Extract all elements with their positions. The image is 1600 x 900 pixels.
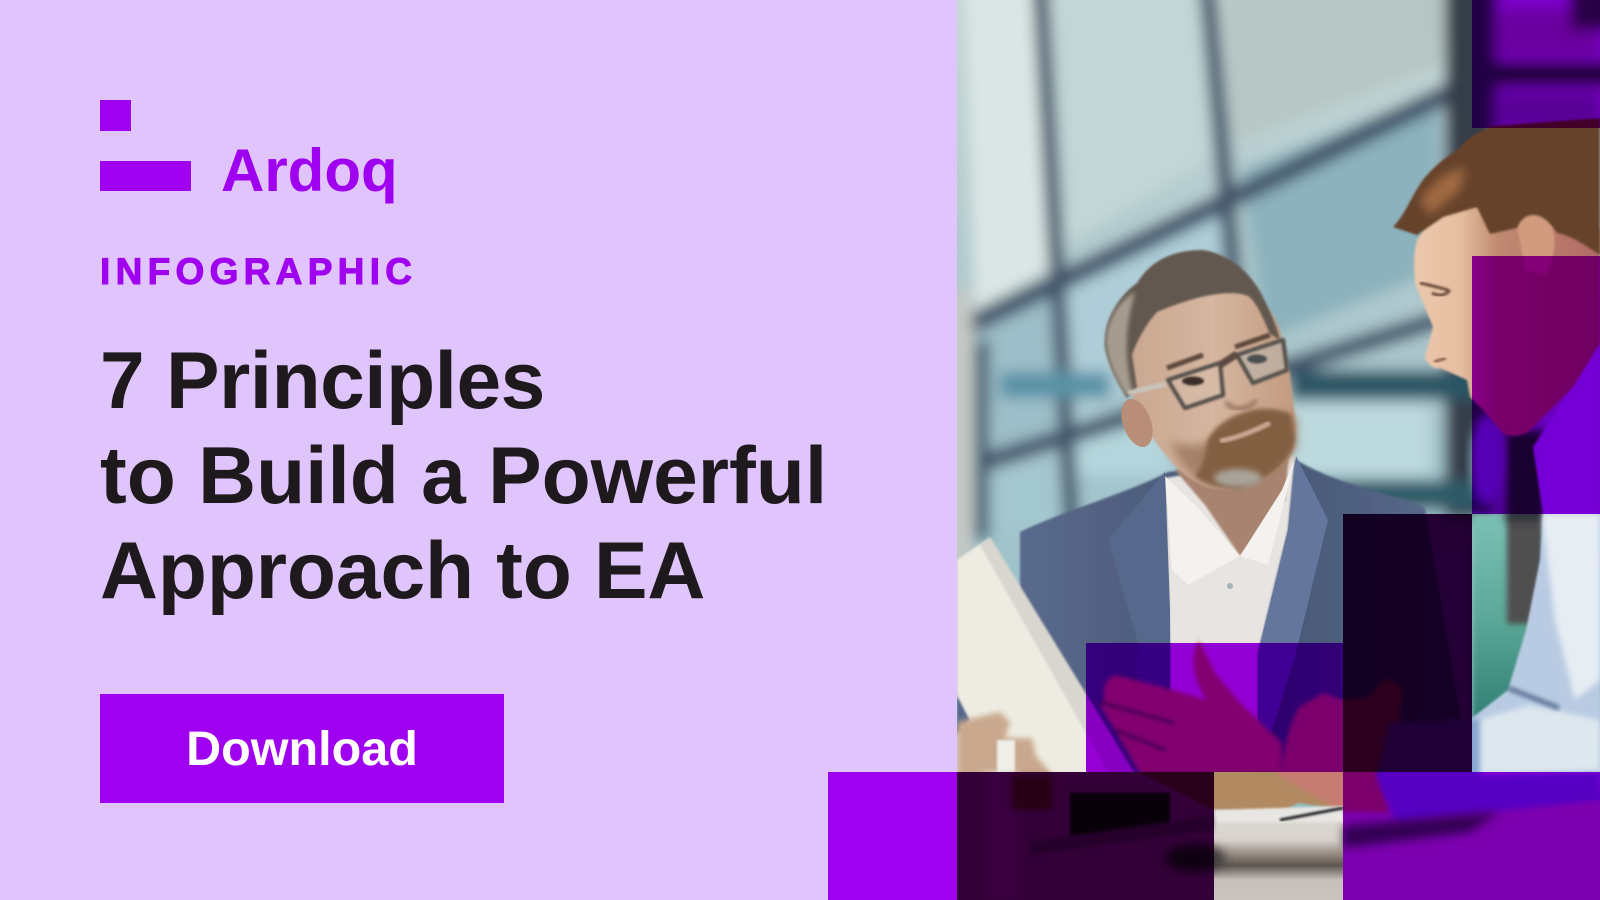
face <box>1128 283 1296 490</box>
second hand <box>1278 678 1402 812</box>
title <box>100 336 827 616</box>
title: Approach to EA <box>100 526 705 616</box>
dark tile: bottom centre <box>957 772 1214 900</box>
logo mark bar <box>100 160 191 191</box>
lapels <box>1108 472 1170 776</box>
logo wordmark: Ardoq <box>221 137 398 204</box>
ear <box>1121 399 1153 447</box>
purple tile: top right <box>1472 0 1600 128</box>
download button <box>100 694 504 803</box>
solid purple tile <box>828 772 957 900</box>
panel: photo with purple tiles <box>828 0 1600 900</box>
chin grey <box>1214 469 1262 487</box>
hand holding tablet <box>957 709 1053 772</box>
tablet <box>957 536 1136 772</box>
table left edge shade <box>983 768 1022 772</box>
pen <box>1280 808 1343 820</box>
papers <box>1215 806 1343 822</box>
neck <box>1174 458 1290 557</box>
area behind right man <box>1471 414 1547 724</box>
man on right <box>1393 118 1600 790</box>
purple tile: right face <box>1472 256 1600 514</box>
dark shadow <box>1343 812 1500 848</box>
collar <box>1165 476 1240 585</box>
window background <box>957 0 1600 815</box>
table right <box>1343 800 1600 900</box>
eye <box>1420 283 1450 295</box>
table dark corner <box>1165 844 1225 872</box>
stubble <box>1170 415 1296 490</box>
button <box>1227 583 1233 589</box>
forearm <box>1141 770 1343 812</box>
title: 7 Principles <box>100 336 545 426</box>
dark hand <box>1141 772 1214 810</box>
eyes and brows <box>1167 335 1270 386</box>
laptop <box>1070 793 1170 837</box>
foreground hand and table <box>950 678 1600 900</box>
eyebrow label: INFOGRAPHIC <box>100 251 417 292</box>
logo mark square <box>100 100 130 130</box>
hair <box>1393 118 1600 255</box>
table left <box>950 772 1220 900</box>
glasses <box>1128 340 1287 408</box>
gesturing hand <box>1099 640 1282 775</box>
shirt <box>1165 456 1296 723</box>
nostril <box>1434 358 1446 362</box>
download button: Download <box>186 722 418 776</box>
shirt highlights <box>1542 514 1600 700</box>
hair <box>1105 250 1280 398</box>
suit jacket <box>1020 458 1470 776</box>
shirt lower <box>1478 704 1600 776</box>
man in suit <box>1020 250 1470 776</box>
hair highlight <box>1420 168 1465 215</box>
shirt <box>1472 343 1600 790</box>
nose <box>1226 400 1256 409</box>
sleeve <box>1377 718 1600 822</box>
purple tile: hand <box>1086 643 1343 772</box>
mouth <box>1220 423 1270 441</box>
logo <box>100 100 398 204</box>
beard <box>1195 409 1295 489</box>
face and neck <box>1414 200 1600 436</box>
ear <box>1517 213 1554 275</box>
window frames <box>970 0 1470 530</box>
fingers below <box>1012 775 1052 810</box>
dark tile: sleeve <box>1343 514 1472 772</box>
table edge <box>1030 815 1214 855</box>
title: to Build a Powerful <box>100 431 827 521</box>
purple tile: bottom right <box>1343 772 1600 900</box>
shirt crease <box>1508 688 1559 708</box>
table centre <box>1214 815 1343 900</box>
